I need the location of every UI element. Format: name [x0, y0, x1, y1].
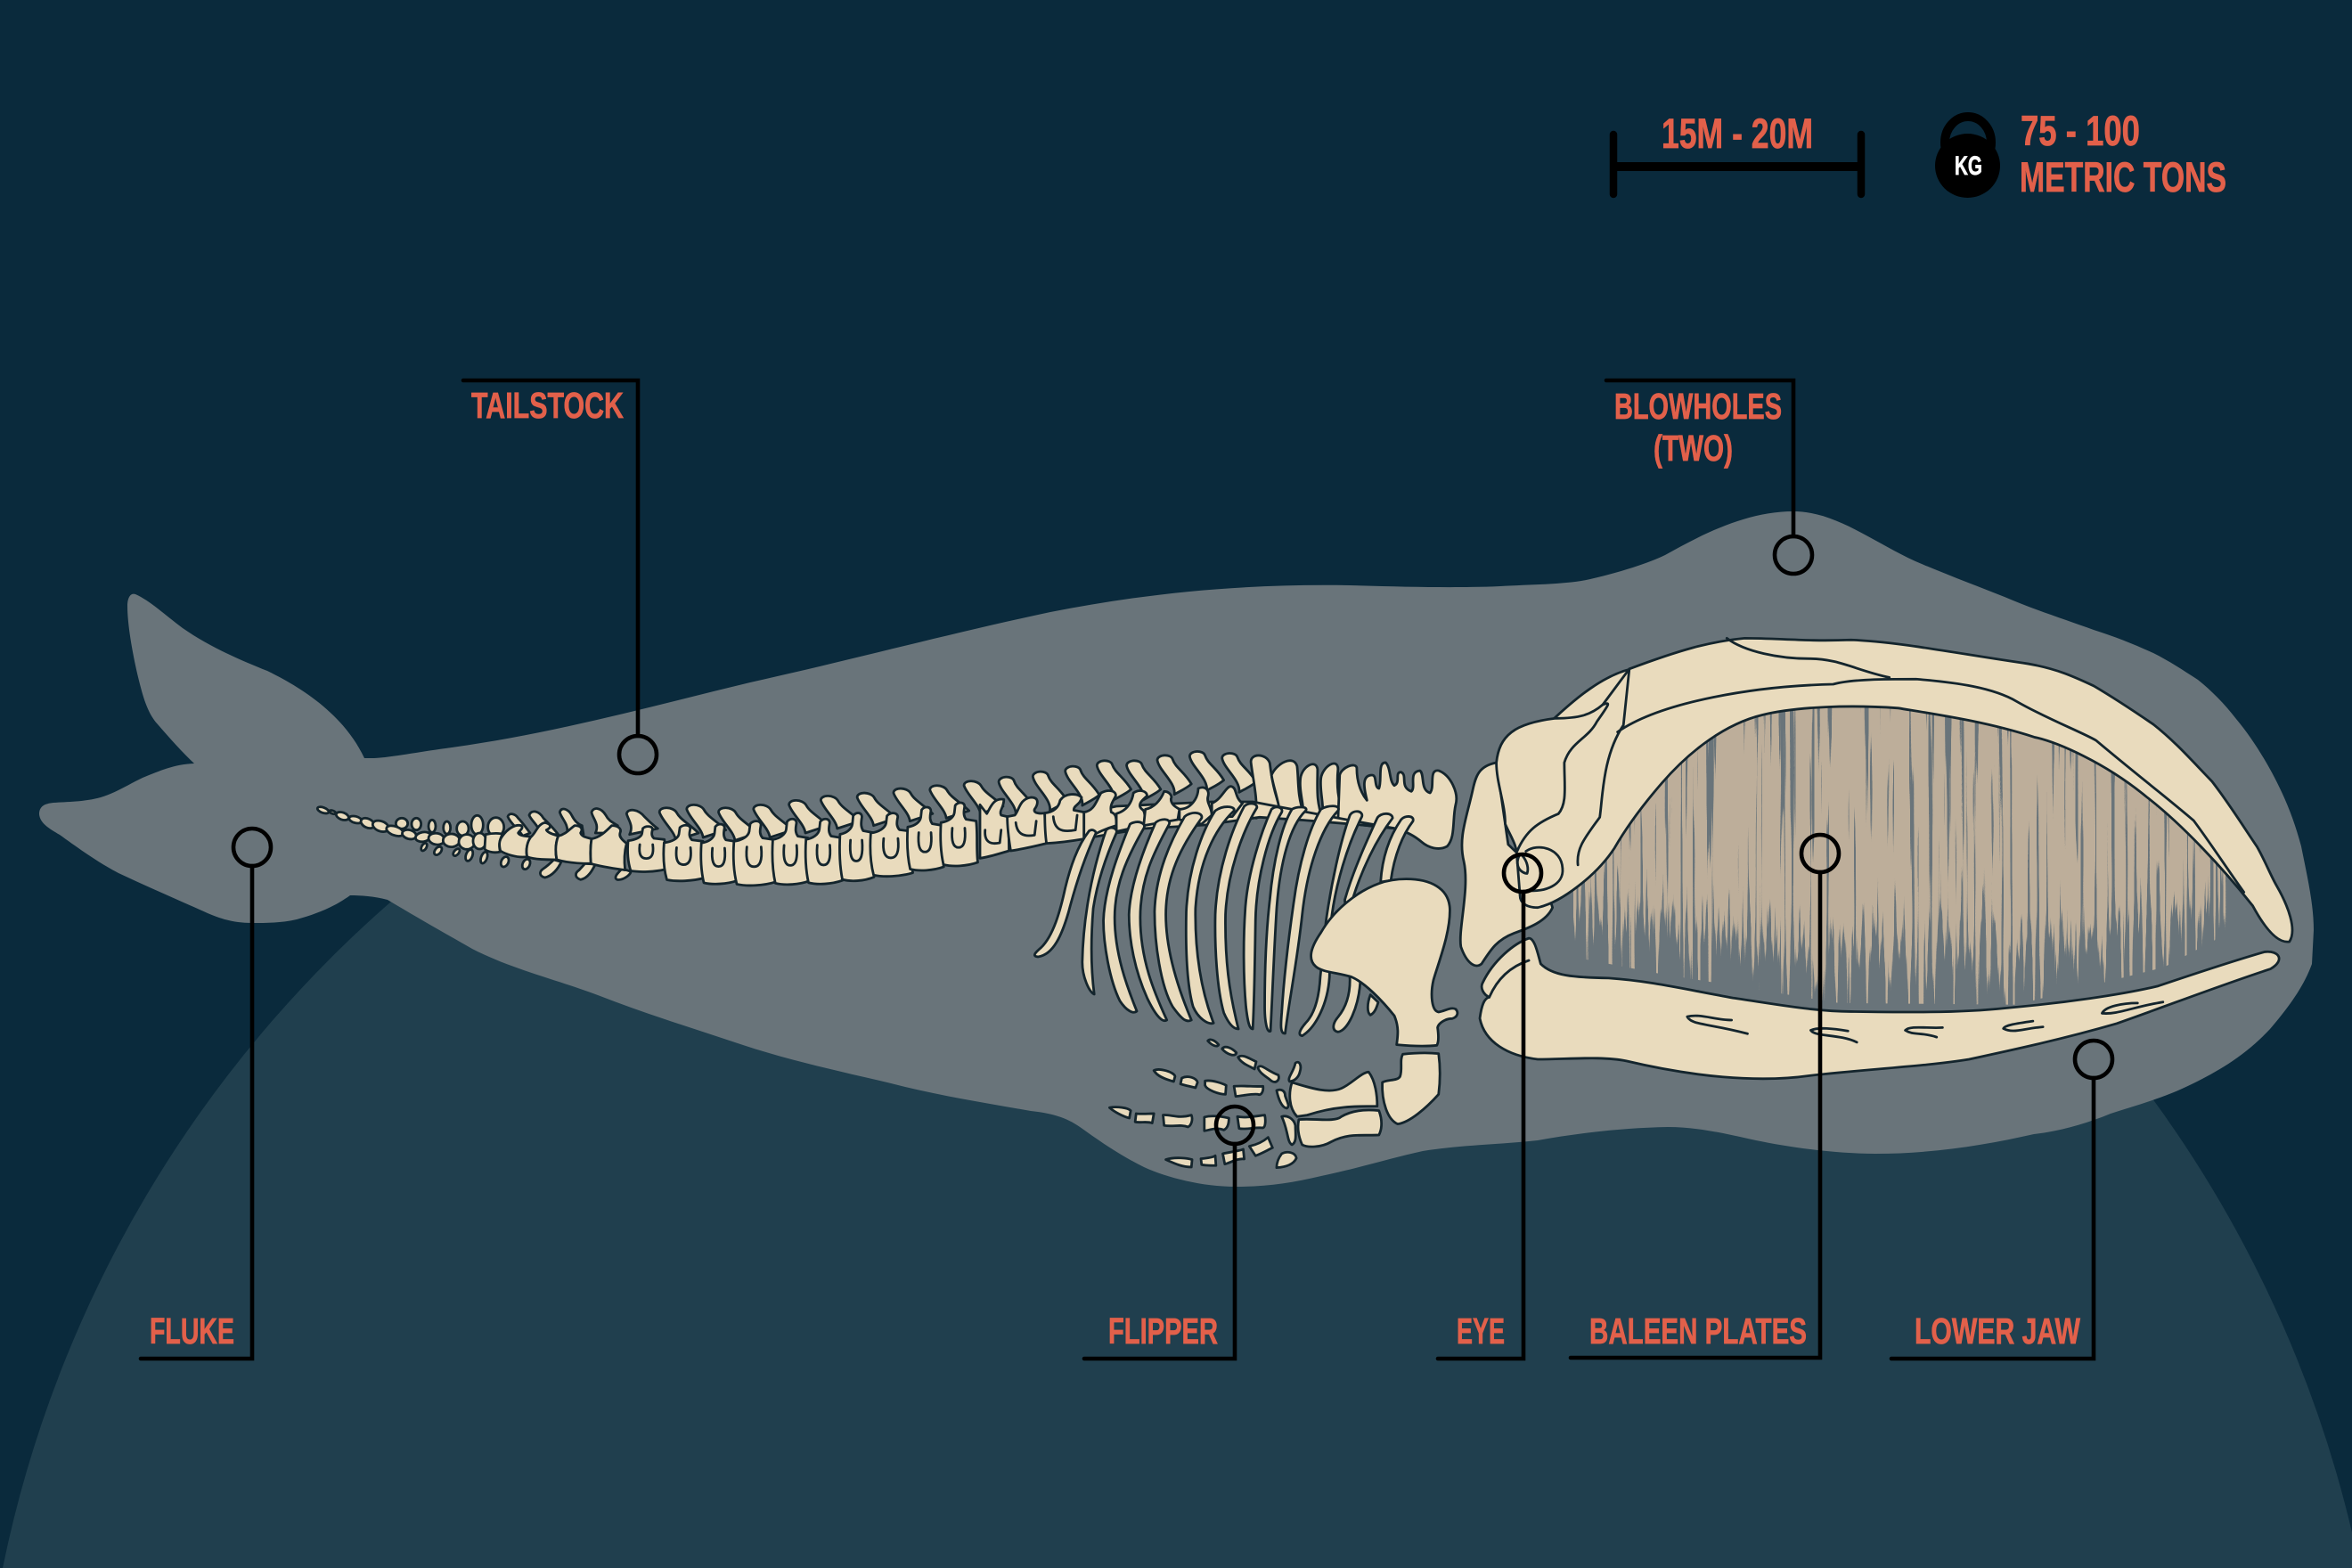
mid spine vertebrae	[628, 781, 1003, 886]
leader: fluke	[141, 829, 271, 1359]
skull and upper jaw	[1460, 638, 2292, 966]
weight text	[2020, 107, 2226, 200]
flipper bones	[1109, 1040, 1440, 1168]
tail tip vertebrae	[316, 805, 657, 879]
leader: tailstock	[463, 380, 657, 773]
label: lower jaw: LOWER JAW	[1915, 1311, 2080, 1352]
length scale bar	[1613, 110, 1861, 194]
leader: eye	[1438, 854, 1541, 1359]
label: flipper: FLIPPER	[1108, 1311, 1218, 1352]
weight text: METRIC TONS	[2020, 153, 2226, 200]
lower jaw	[1480, 938, 2279, 1079]
label: blowholes (two)	[1614, 386, 1782, 469]
leader: lower jaw	[1891, 1041, 2112, 1359]
label: tailstock: TAILSTOCK	[471, 385, 624, 426]
weight text: 75 - 100	[2021, 107, 2140, 154]
length scale bar: 15M - 20M	[1662, 110, 1813, 157]
shoulder blade	[1311, 879, 1458, 1046]
ribs	[1034, 804, 1413, 1036]
label: baleen plates: BALEEN PLATES	[1589, 1311, 1807, 1352]
label: blowholes (two): (TWO)	[1654, 428, 1733, 469]
leader: baleen plates	[1571, 835, 1839, 1358]
leader: flipper	[1084, 1107, 1254, 1359]
baleen plates	[1573, 650, 2228, 960]
icon: kettlebell weight: KG	[1955, 151, 1982, 181]
icon: kettlebell weight	[1935, 117, 2000, 198]
whale body silhouette	[39, 511, 2314, 1187]
label: eye: EYE	[1457, 1311, 1505, 1352]
background hemisphere	[3, 891, 2352, 1568]
label: blowholes (two): BLOWHOLES	[1614, 386, 1782, 427]
thoracic spine and neck	[980, 751, 1457, 858]
leader: blowholes	[1606, 380, 1812, 574]
label: fluke: FLUKE	[150, 1311, 234, 1352]
